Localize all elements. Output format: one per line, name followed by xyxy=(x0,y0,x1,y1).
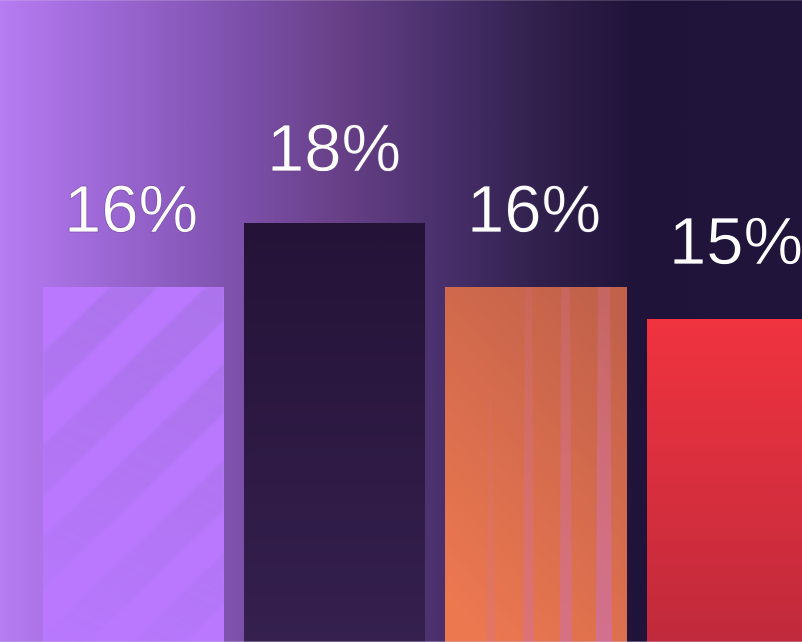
label: 18%: 18% xyxy=(267,111,401,186)
bar 3: orange 16% xyxy=(445,287,627,642)
label: 15%: 15% xyxy=(669,204,802,279)
label: 16%: 16% xyxy=(467,172,601,247)
bar 1: purple 16% xyxy=(43,287,224,642)
bar 2: dark 18% xyxy=(244,223,425,642)
label: 16%: 16% xyxy=(64,172,198,247)
bar 4: red 15% xyxy=(647,319,802,642)
